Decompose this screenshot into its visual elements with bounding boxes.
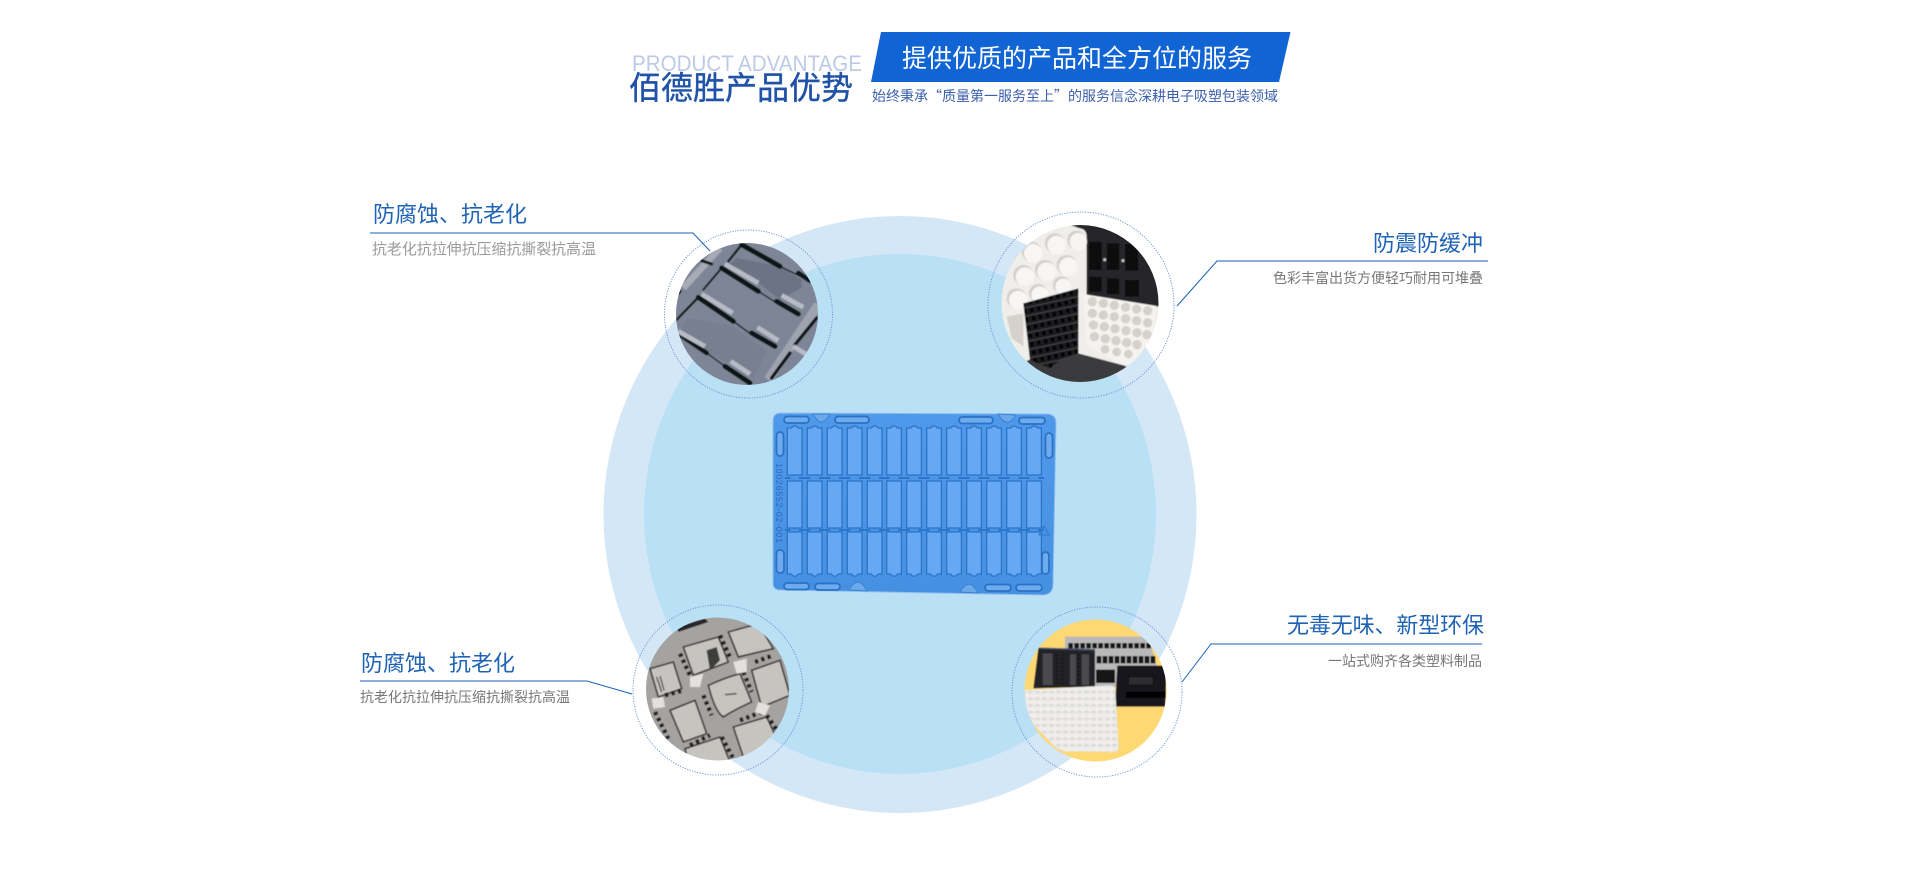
white bubble panel [1083, 294, 1157, 367]
black tray cells [1089, 242, 1139, 297]
feature: top left [370, 197, 832, 398]
feature title: 防震防缓冲 [1373, 226, 1483, 258]
leader line [1182, 644, 1482, 682]
bubbles [1007, 231, 1086, 308]
tray edge arcs [813, 414, 1016, 593]
recycle mark [1039, 526, 1049, 535]
tray body [773, 413, 1056, 595]
tray handle slots [776, 416, 1052, 591]
banner shape [871, 32, 1290, 82]
feature: bottom left [360, 605, 803, 775]
photo: silver tray [646, 618, 789, 760]
dotted ring [633, 605, 803, 775]
photo: white and black trays [1002, 225, 1158, 382]
leader line [370, 233, 710, 251]
main heading: 佰德胜产品优势 [629, 63, 853, 109]
feature description: 一站式购齐各类塑料制品 [1328, 651, 1482, 671]
tray part number: 10026552-02-001 [774, 463, 784, 543]
feature description: 色彩丰富出货方便轻巧耐用可堆叠 [1273, 268, 1483, 288]
photo: assorted trays on yellow [1024, 620, 1166, 762]
black lattice panel [1023, 288, 1078, 368]
dotted ring [1012, 607, 1182, 777]
dotted ring [988, 212, 1174, 398]
header: description line: 始终秉承“质量第一服务至上”的服务信念深耕电子吸塑包装领域 [872, 86, 1278, 106]
tray cells [785, 426, 1044, 576]
leader line [360, 681, 632, 694]
feature title: 防腐蚀、抗老化 [361, 646, 515, 678]
feature title: 无毒无味、新型环保 [1287, 608, 1484, 640]
feature description: 抗老化抗拉伸抗压缩抗撕裂抗高温 [372, 238, 596, 259]
background circles [604, 216, 1196, 813]
banner text: 提供优质的产品和全方位的服务 [902, 39, 1252, 75]
header: slogan banner [871, 32, 1290, 82]
photo: grey tray [676, 243, 818, 385]
silver cells [650, 624, 790, 769]
header: left heading block [629, 51, 862, 109]
english subtitle: PRODUCT ADVANTAGE [632, 51, 862, 76]
central blue tray [773, 413, 1056, 595]
leader line [1177, 261, 1488, 306]
feature: bottom right [1012, 607, 1484, 777]
feature title: 防腐蚀、抗老化 [373, 197, 527, 229]
feature: top right [988, 212, 1488, 398]
dotted ring [664, 230, 832, 398]
feature description: 抗老化抗拉伸抗压缩抗撕裂抗高温 [360, 687, 570, 707]
